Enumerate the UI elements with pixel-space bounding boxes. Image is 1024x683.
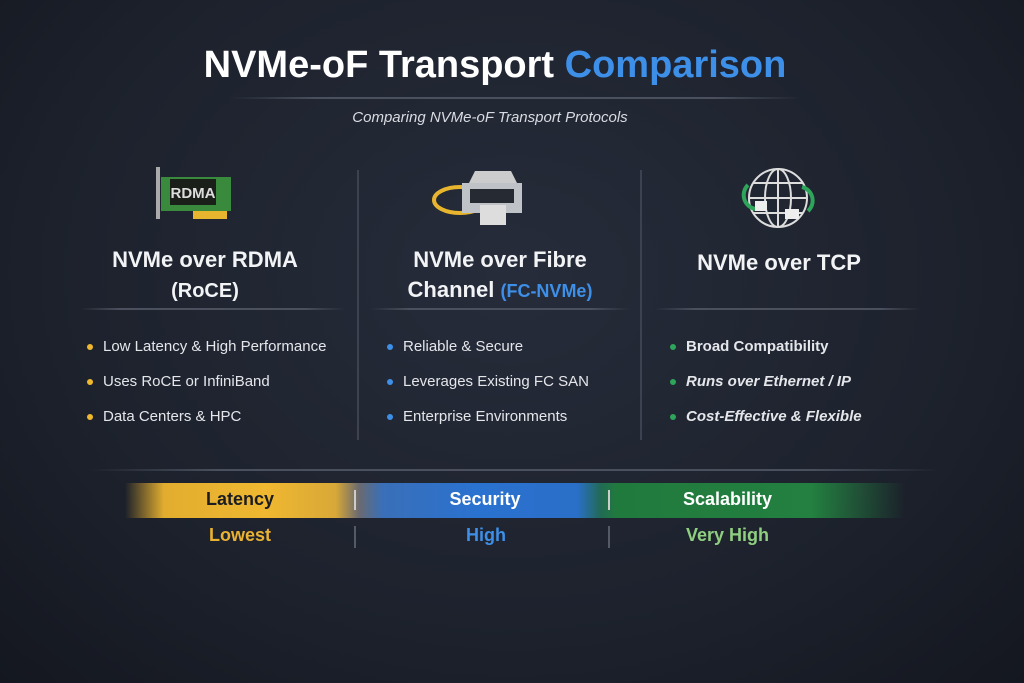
subtitle: Comparing NVMe-oF Transport Protocols <box>352 109 628 126</box>
panel: Fibre Channel <box>378 171 622 425</box>
heading: NVMe over TCP <box>697 250 861 275</box>
bullets: Low Latency & High Performance <box>103 338 326 355</box>
icon: FC switch <box>432 171 522 225</box>
comparison bar <box>125 483 905 518</box>
panel: RDMA <box>86 167 337 425</box>
title: NVMe-oF Transport Comparison <box>204 44 786 86</box>
values row <box>209 525 769 548</box>
comparison bar: Latency <box>206 489 274 509</box>
icon: globe <box>742 168 815 228</box>
heading: NVMe over RDMA <box>112 247 298 272</box>
bullets: Runs over Ethernet / IP <box>686 373 851 390</box>
comparison bar: Scalability <box>683 489 772 509</box>
bullets: Enterprise Environments <box>403 408 567 425</box>
values row: Very High <box>686 525 769 545</box>
bullets: Uses RoCE or InfiniBand <box>103 373 270 390</box>
bullets: Broad Compatibility <box>686 338 829 355</box>
comparison bar: Security <box>449 489 521 509</box>
bullets: Data Centers & HPC <box>103 408 241 425</box>
heading <box>408 247 592 302</box>
panel: TCP <box>663 168 913 425</box>
heading <box>112 247 298 302</box>
bullets <box>87 338 326 425</box>
values row: High <box>466 525 506 545</box>
values row: Lowest <box>209 525 271 545</box>
bullets: Leverages Existing FC SAN <box>403 373 589 390</box>
bullets <box>670 338 862 425</box>
bullets: Reliable & Secure <box>403 338 523 355</box>
bullets <box>387 338 589 425</box>
bullets: Cost-Effective & Flexible <box>686 408 862 425</box>
heading: Channel (FC-NVMe) <box>408 277 592 302</box>
heading: (RoCE) <box>171 280 239 302</box>
heading: NVMe over Fibre <box>413 247 587 272</box>
icon: RDMA card <box>156 167 231 219</box>
icon: RDMA card: RDMA <box>170 185 216 202</box>
